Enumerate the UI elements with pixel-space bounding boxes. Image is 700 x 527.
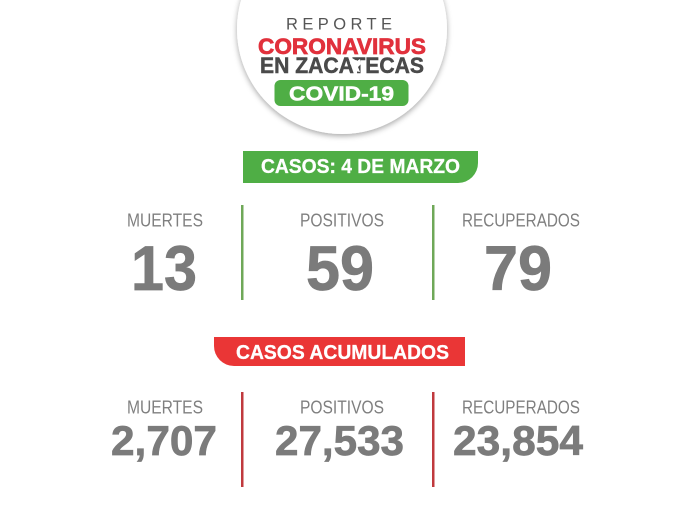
- logo: COVID-19: COVID-19: [289, 84, 394, 106]
- stat: recuperados acumulados: [453, 398, 584, 464]
- panel: daily cases: [127, 205, 580, 304]
- stat: muertes acumuladas: MUERTES: [127, 398, 203, 418]
- stat: positivos acumulados: POSITIVOS: [300, 398, 384, 418]
- icon: map mark over the T: [350, 58, 361, 72]
- badge circle: [237, 0, 447, 134]
- stat: positivos acumulados: 27,533: [275, 417, 404, 464]
- stat: positivos: [300, 210, 384, 304]
- COVID-19 pill: [274, 80, 408, 106]
- stat: positivos: 59: [306, 234, 374, 304]
- banner: casos acumulados: CASOS ACUMULADOS: [236, 341, 449, 364]
- logo badge: [237, 0, 447, 134]
- stat: muertes: 13: [131, 234, 197, 304]
- logo: EN ZACATECAS: EN ZACATECAS: [260, 53, 424, 78]
- panel: accumulated cases: [111, 392, 584, 487]
- stat: muertes: MUERTES: [127, 210, 203, 230]
- stat: muertes acumuladas: 2,707: [111, 417, 217, 464]
- stat: recuperados: [462, 210, 580, 304]
- logo: REPORTE: REPORTE: [286, 16, 392, 34]
- stat: recuperados: RECUPERADOS: [462, 210, 580, 230]
- logo: CORONAVIRUS: CORONAVIRUS: [258, 34, 426, 59]
- stat: recuperados acumulados: RECUPERADOS: [462, 398, 580, 418]
- banner: casos 4 de marzo: CASOS: 4 DE MARZO: [261, 155, 460, 178]
- stat: recuperados acumulados: 23,854: [453, 417, 584, 464]
- stat: positivos: POSITIVOS: [300, 210, 384, 230]
- stat: muertes: [127, 210, 203, 304]
- banner: casos 4 de marzo: [243, 151, 478, 183]
- stat: recuperados: 79: [484, 234, 552, 304]
